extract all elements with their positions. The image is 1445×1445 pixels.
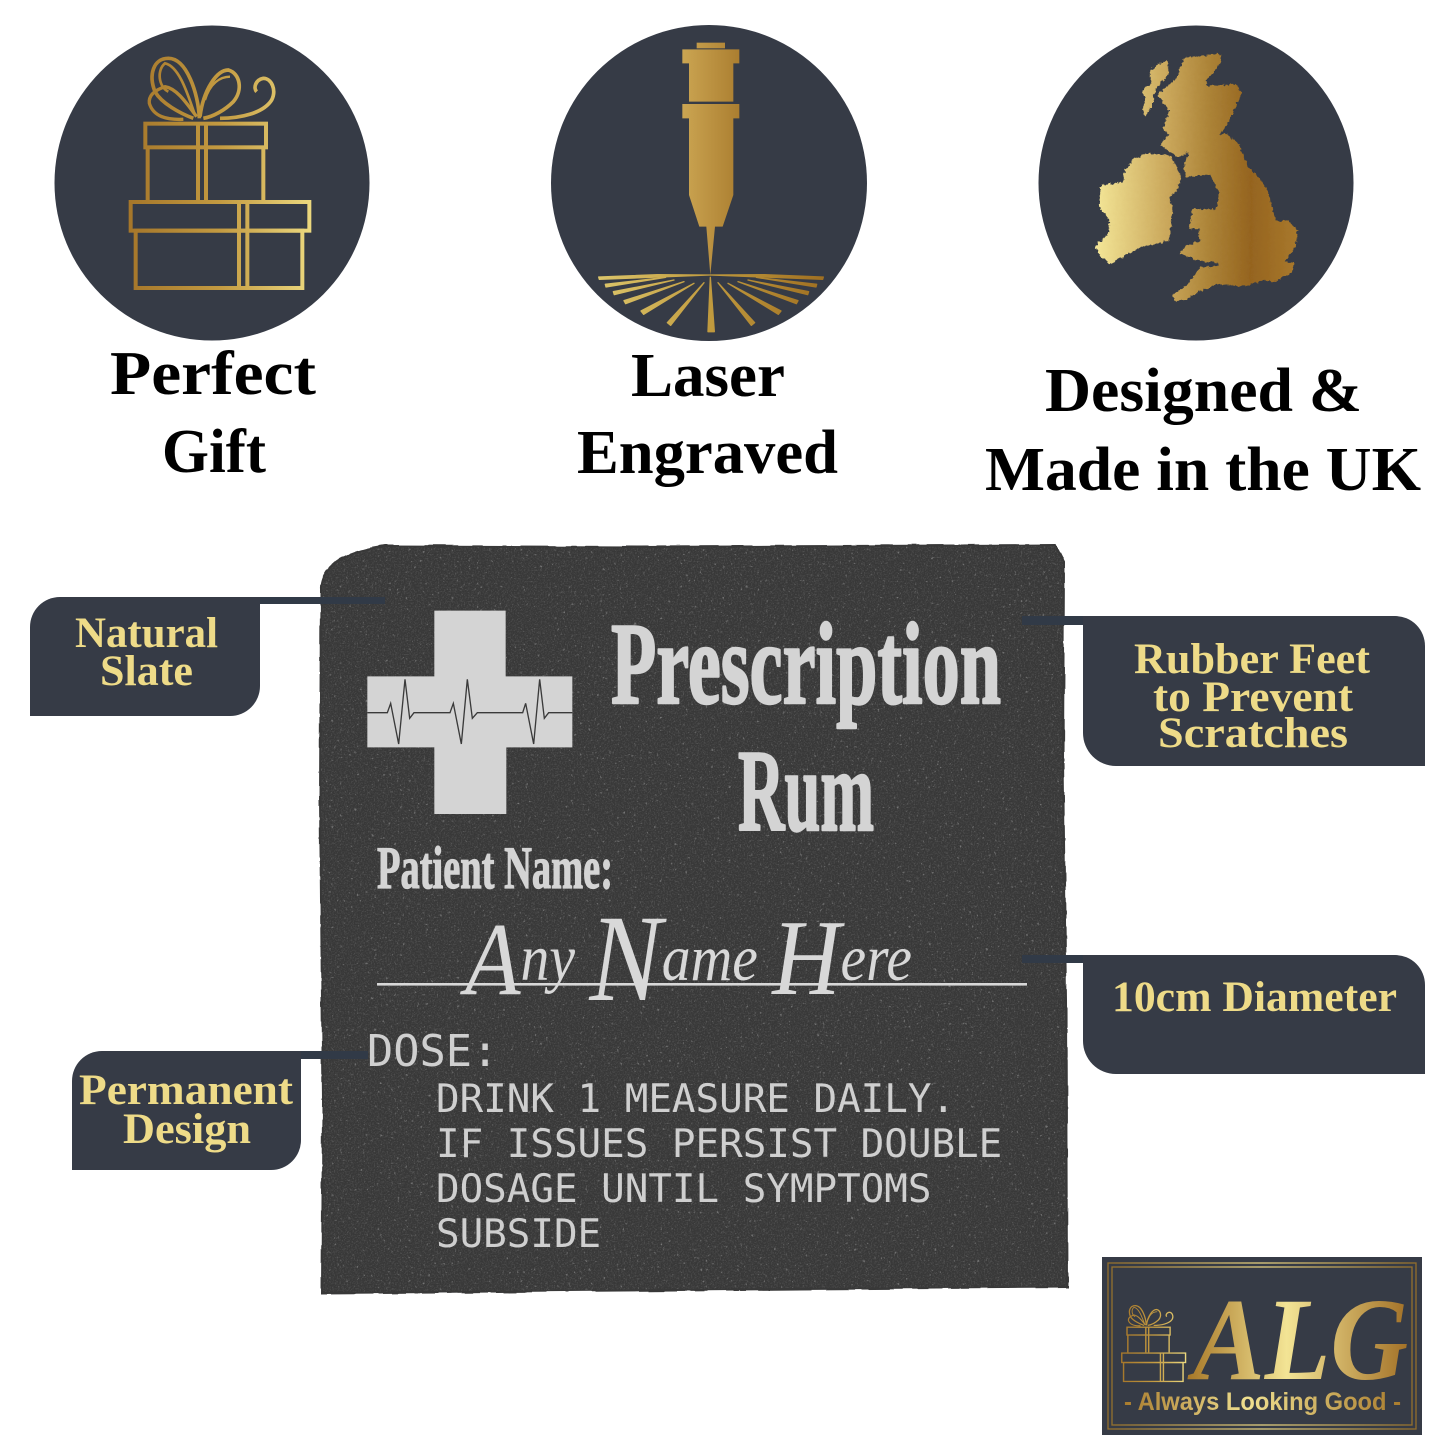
panel: designed and made in the UK feature — [985, 26, 1421, 504]
callout: Rubber Feet — [1022, 616, 1425, 766]
heading: Perfect Gift: Perfect — [110, 340, 316, 408]
callout: Permanent Design: Design — [123, 1106, 251, 1153]
callout: Rubber Feet: to Prevent — [1153, 674, 1354, 721]
label: Patient Name: Patient Name: — [377, 835, 613, 901]
heading: Laser Engraved: Engraved — [577, 419, 838, 487]
callout: Rubber Feet: Scratches — [1158, 710, 1348, 757]
icon: map of UK and Ireland in circle — [1038, 26, 1354, 340]
signature line — [377, 983, 1027, 986]
heading: Designed and Made in the UK — [985, 357, 1421, 504]
dose instructions: SUBSIDE — [436, 1212, 601, 1257]
signature: Any Name Here: ny — [521, 922, 589, 995]
title: Prescription Rum: Prescription — [611, 600, 1001, 729]
heading: Perfect Gift — [110, 340, 316, 486]
logo monogram: ALG: ALG — [1187, 1274, 1408, 1405]
callout: Natural Slate — [30, 597, 385, 716]
callout: Natural Slate: Natural — [75, 610, 218, 657]
heading: Designed and Made in the UK: Designed & — [1045, 357, 1362, 425]
callout: 10cm Diameter: 10cm Diameter — [1112, 974, 1397, 1021]
dose instructions: DOSAGE UNTIL SYMPTOMS — [436, 1167, 931, 1212]
panel: laser engraved feature — [551, 25, 867, 487]
dose instructions — [367, 1027, 1002, 1257]
icon: stacked gift boxes in circle — [54, 26, 370, 340]
signature: Any Name Here: N — [589, 890, 667, 1027]
title: Prescription Rum — [611, 600, 1001, 856]
callout: 10cm Diameter — [1022, 955, 1425, 1074]
signature: Any Name Here: ere — [840, 922, 912, 995]
panel: slate coaster — [319, 544, 1069, 1294]
panel: perfect gift feature — [54, 26, 370, 486]
heading: Laser Engraved: Laser — [631, 342, 785, 410]
callout: Natural Slate: Slate — [100, 648, 193, 695]
heading: Perfect Gift: Gift — [162, 418, 266, 486]
slate base — [319, 544, 1069, 1294]
dose instructions: DRINK 1 MEASURE DAILY. — [436, 1077, 955, 1122]
logo tagline: - Always Looking Good - — [1124, 1388, 1401, 1416]
heading: Laser Engraved — [577, 342, 838, 487]
dose instructions: IF ISSUES PERSIST DOUBLE — [436, 1122, 1002, 1167]
dose instructions: DOSE: — [367, 1027, 498, 1077]
signature: Any Name Here: A — [460, 902, 521, 1017]
callout: Rubber Feet: Rubber Feet — [1134, 636, 1371, 683]
heading: Designed and Made in the UK: Made in the UK — [985, 436, 1421, 504]
icon: medical cross with heartbeat — [367, 611, 572, 814]
logo: Always Looking Good — [1102, 1257, 1422, 1435]
signature: Any Name Here: ame — [662, 922, 772, 995]
callout: Permanent Design — [72, 1051, 368, 1170]
callout: Permanent Design: Permanent — [79, 1067, 294, 1114]
icon: laser engraver in circle — [551, 25, 867, 341]
logo icon: gift boxes — [1122, 1306, 1186, 1381]
signature: Any Name Here: H — [771, 899, 845, 1018]
title: Prescription Rum: Rum — [738, 727, 874, 856]
